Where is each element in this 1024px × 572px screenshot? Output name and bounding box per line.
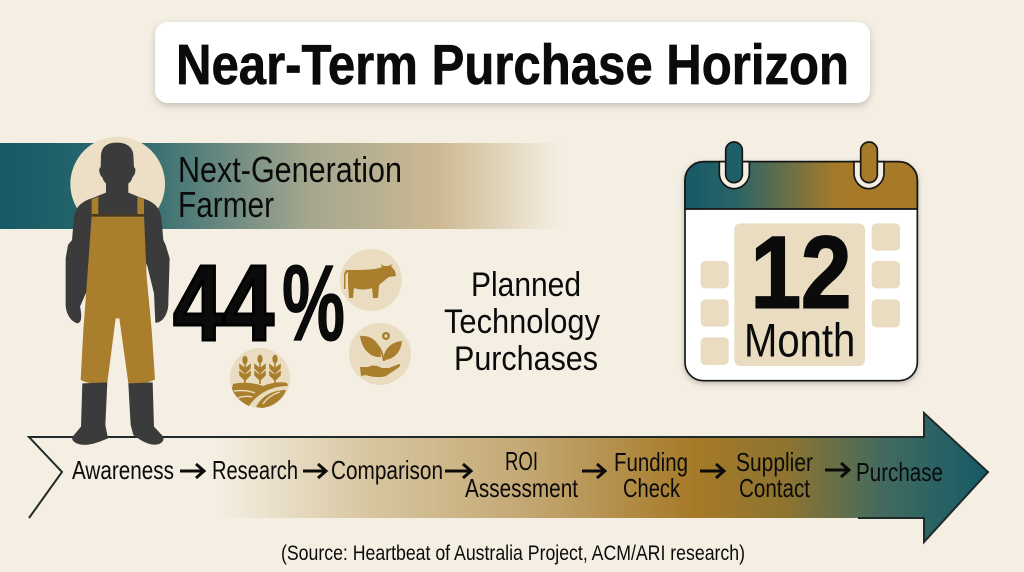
panel: next-generation farmer banner: Next-Generation (178, 149, 402, 190)
boots (72, 382, 108, 445)
process steps: Supplier (736, 447, 813, 477)
process steps: Funding (614, 447, 688, 477)
date tiles (701, 223, 900, 366)
process steps (72, 446, 943, 503)
process steps: Purchase (856, 457, 943, 487)
icon: farmer silhouette (66, 137, 170, 445)
process steps: Contact (739, 473, 811, 503)
icon: calendar (685, 142, 917, 381)
icon: cow (340, 249, 402, 311)
icon: plant in hand (349, 323, 411, 385)
overalls (81, 197, 155, 384)
panel: next-generation farmer banner (0, 143, 562, 229)
number: 12: 12 (751, 215, 851, 329)
sun circle behind farmer (70, 137, 165, 231)
icon: wheat and fields (230, 348, 290, 408)
title (155, 22, 870, 103)
title: Near-Term Purchase Horizon (176, 33, 849, 97)
text block: planned technology purchases: Planned (471, 266, 581, 304)
label: month: Month (744, 315, 855, 368)
process steps: Awareness (72, 455, 174, 485)
process steps: ROI (505, 446, 538, 476)
farmer body (66, 143, 170, 323)
calendar rings (719, 142, 884, 189)
process steps: Research (212, 455, 298, 485)
process steps: Comparison (331, 455, 443, 485)
calendar header (685, 162, 917, 209)
text block: planned technology purchases: Purchases (454, 340, 598, 378)
process steps: Assessment (465, 473, 579, 503)
text block: planned technology purchases: Technology (444, 303, 600, 341)
big stat: 44%: 44 (173, 242, 274, 363)
calendar body (685, 162, 917, 381)
panel: next-generation farmer banner: Farmer (178, 184, 274, 225)
text block: planned technology purchases (444, 266, 600, 378)
process steps: Check (623, 473, 681, 503)
timeline arrow (29, 413, 988, 542)
big stat: 44% (173, 242, 345, 363)
source note: (Source: Heartbeat of Australia Project, ACM/ARI research) (281, 542, 745, 565)
step arrows (180, 463, 849, 478)
big stat: 44%: % (282, 242, 345, 363)
